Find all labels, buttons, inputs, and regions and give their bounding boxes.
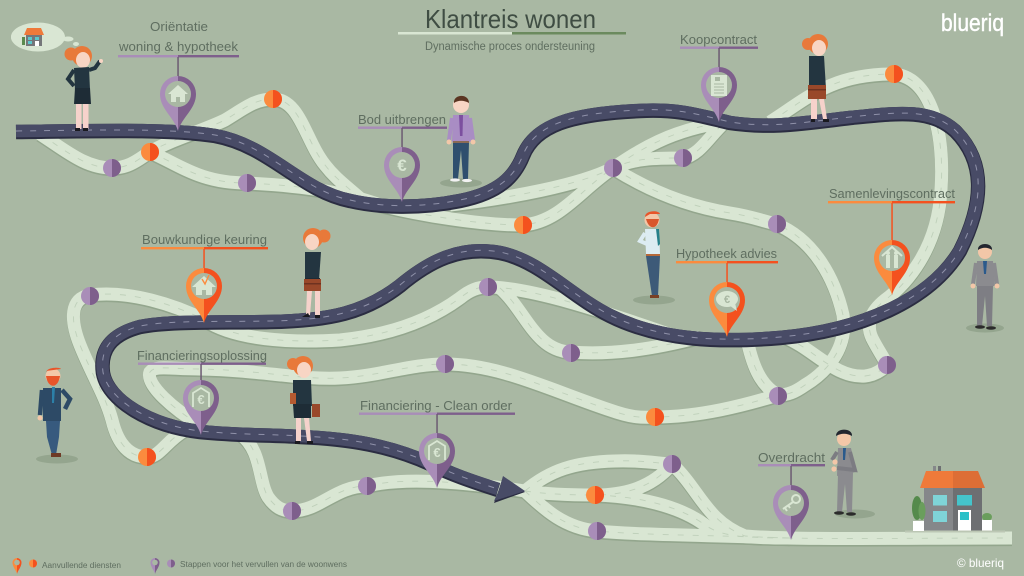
person: grey suit man with watch [831,430,875,518]
title [398,4,626,53]
person: woman with briefcase on lower road [302,228,330,318]
person: woman with briefcase on top road [802,34,829,122]
person: red-bearded man in blue suit [36,368,78,464]
pin: Bod uitbrengen: € [397,156,407,175]
pin: Overdracht [758,450,825,540]
pin: Hypotheek advies: Hypotheek advies [676,246,777,261]
legend: aanvullende diensten: Aanvullende diensten [42,561,121,570]
orange service nodes [138,65,903,504]
legend: stappen: Stappen voor het vervullen van de woonwens [180,560,347,569]
logo: blueriq [941,10,1004,37]
pin: Financiering - Clean order: Financiering - Clean order [360,398,513,413]
pin: Financieringsoplossing: € [197,392,205,407]
legend: aanvullende diensten [12,558,121,574]
person: woman waving [64,46,103,131]
pin: Samenlevingscontract: Samenlevingscontract [829,186,955,201]
person: red-bearded man in white shirt [633,211,675,304]
pin: Koopcontract [680,32,758,122]
pin: Samenlevingscontract [828,186,955,295]
person: woman with bags on road [287,356,320,444]
pin: Financieringsoplossing: Financieringsoplossing [137,348,267,363]
pin: Financieringsoplossing [137,348,267,435]
pin: Bod uitbrengen: Bod uitbrengen [358,112,446,127]
pin: Koopcontract: Koopcontract [680,32,757,47]
pin: Bod uitbrengen [358,112,447,202]
thought cloud [11,22,79,52]
person: grey suit man right [966,244,1004,332]
title: Klantreis wonen [425,4,596,34]
pin: Oriëntatie woning & hypotheek: woning & hypotheek [118,39,238,54]
pin: Overdracht: Overdracht [758,450,825,465]
pin: Hypotheek advies: € [724,294,730,306]
main road with arrow [16,110,978,503]
pin: Oriëntatie woning & hypotheek [118,19,239,131]
house [905,466,1005,532]
copyright logo: © blueriq [957,556,1004,570]
title: Dynamische proces ondersteuning [425,41,595,53]
purple stop nodes [81,149,896,540]
legend: stappen [150,558,347,574]
pin: Bouwkundige keuring [141,232,268,323]
person: man in purple shirt [440,96,482,188]
side roads [40,74,1012,540]
pin: Bouwkundige keuring: Bouwkundige keuring [142,232,267,247]
pin: Oriëntatie woning & hypotheek: Oriëntatie [150,19,208,34]
pin: Hypotheek advies [676,246,778,337]
pin: Financiering - Clean order [359,398,515,488]
pin: Financiering - Clean order: € [433,445,441,460]
